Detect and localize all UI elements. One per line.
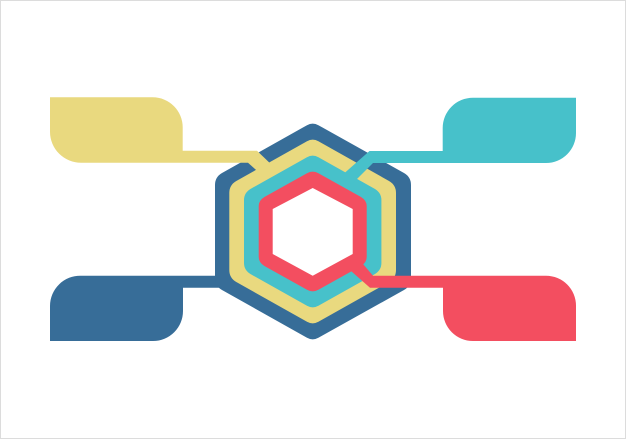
- hexagon ring: teal: [244, 156, 381, 307]
- hexagon ring: blue: [215, 124, 411, 339]
- blue panel with connector: [50, 276, 225, 341]
- hexagon ring: yellow: [229, 140, 396, 323]
- yellow panel with connector: [50, 97, 276, 177]
- red panel with connector: [351, 262, 576, 341]
- central hexagon rings: [215, 124, 411, 339]
- hexagon ring: red: [259, 172, 367, 291]
- teal panel with connector: [340, 98, 576, 184]
- hexagon centre: white: [273, 188, 353, 276]
